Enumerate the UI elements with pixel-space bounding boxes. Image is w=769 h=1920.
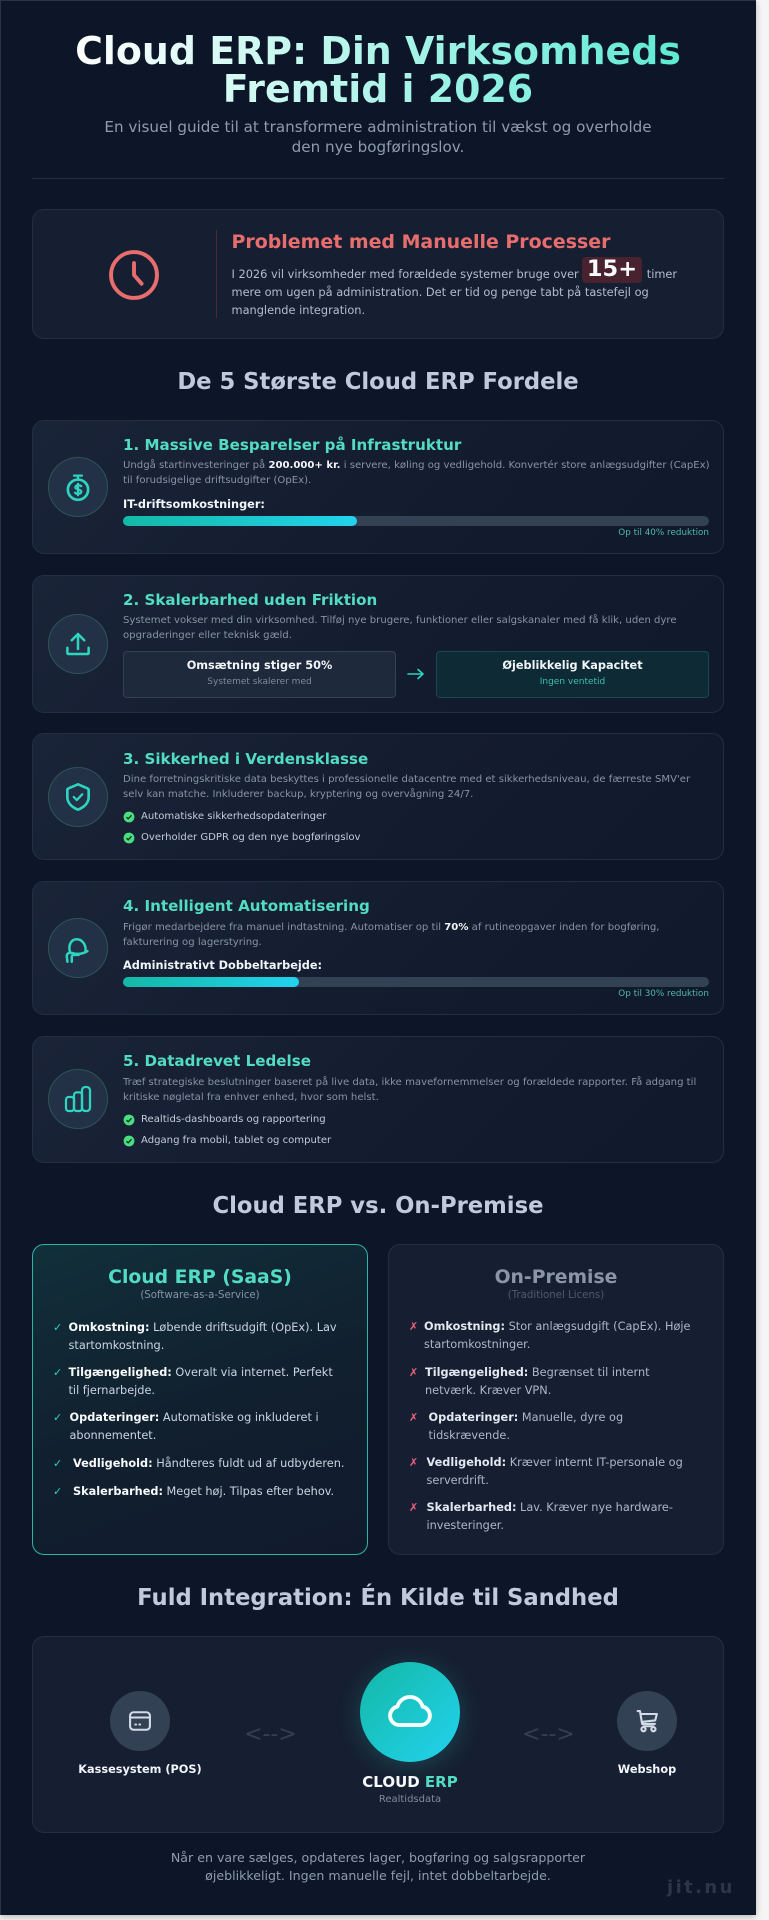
panel: problem — [32, 178, 724, 339]
panel: benefit 5 — [32, 1036, 724, 1163]
problem text — [232, 267, 678, 316]
benefit 5 title: 5. Datadrevet Ledelse — [123, 1052, 311, 1070]
benefit 3 text: selv kan matche. Inkluderer backup, kryptering og overvågning 24/7. — [123, 789, 473, 800]
panel: benefit 4 — [32, 881, 724, 1015]
closing text: Når en vare sælges, opdateres lager, bogføring og salgsrapporter — [171, 1850, 585, 1865]
benefit 3 text — [123, 774, 690, 800]
problem text: I 2026 vil virksomheder med forældede systemer bruge over timer — [232, 267, 677, 281]
panel: Cloud ERP: Tilgængelighed: Overalt via internet. Perfekt — [68, 1366, 333, 1379]
arrow: POS to ERP: <--> — [244, 1722, 297, 1747]
item: skalerbarhed: ✓ — [53, 1485, 62, 1498]
On-Premise subheading: (Traditionel Licens) — [508, 1290, 604, 1301]
Cloud ERP subheading: (Software-as-a-Service) — [140, 1290, 260, 1301]
panel: Cloud ERP: Vedligehold: Håndteres fuldt ud af udbyderen. — [73, 1457, 344, 1470]
box: omsætning: Systemet skalerer med — [207, 677, 312, 687]
box: omsætning — [123, 651, 396, 698]
icon: card terminal — [110, 1691, 170, 1751]
panel: On-Premise: startomkostninger. — [424, 1338, 530, 1351]
panel: benefit 3 — [32, 733, 724, 860]
item: skalerbarhed: ✗ — [409, 1501, 418, 1514]
panel: Cloud ERP: Skalerbarhed: Meget høj. Tilpas efter behov. — [73, 1485, 334, 1498]
panel: On-Premise: serverdrift. — [426, 1474, 489, 1487]
Cloud ERP heading: Cloud ERP (SaaS) — [108, 1267, 292, 1288]
panel: Cloud ERP: Opdateringer: Automatiske og inkluderet i — [70, 1411, 319, 1424]
benefit 1 text: til forudsigelige driftsudgifter (OpEx). — [123, 475, 311, 486]
panel: On-Premise: Vedligehold: Kræver internt IT-personale og — [426, 1456, 683, 1469]
benefit 4 text: fakturering og lagerstyring. — [123, 937, 262, 948]
panel: Cloud ERP: til fjernarbejde. — [68, 1384, 155, 1397]
title: Cloud ERP: Din Virksomheds — [75, 29, 681, 73]
panel: benefit 2 — [32, 575, 724, 713]
panel: Cloud ERP — [32, 1244, 368, 1555]
icon: upload — [48, 614, 108, 674]
caption: 30% reduktion: Op til 30% reduktion — [618, 989, 709, 999]
heading: integration: Fuld Integration: Én Kilde til Sandhed — [137, 1585, 619, 1611]
caption: 40% reduktion: Op til 40% reduktion — [618, 528, 709, 538]
benefit 5 text: Træf strategiske beslutninger baseret på live data, ikke mavefornemmelser og forældede rapporter. Få adgang til — [123, 1077, 696, 1088]
webshop label: Webshop — [618, 1763, 676, 1776]
closing text: øjeblikkeligt. Ingen manuelle fejl, intet dobbeltarbejde. — [205, 1868, 551, 1883]
box: kapacitet: Ingen ventetid — [540, 677, 605, 687]
box: kapacitet: Øjeblikkelig Kapacitet — [502, 659, 643, 672]
box: kapacitet — [436, 651, 709, 698]
On-Premise heading: On-Premise — [495, 1267, 617, 1288]
benefit 1 text — [123, 459, 710, 486]
panel: Cloud ERP: Omkostning: Løbende driftsudgift (OpEx). Lav — [68, 1321, 337, 1334]
Cloud ERP label: CLOUD ERP — [362, 1773, 458, 1791]
panel: On-Premise: netværk. Kræver VPN. — [425, 1384, 551, 1397]
benefit 1 text: Undgå startinvesteringer på 200.000+ kr. i servere, køling og vedligehold. Konvertér store anlægsudgifter (CapEx) — [123, 460, 710, 471]
benefit 2 title: 2. Skalerbarhed uden Friktion — [123, 591, 377, 609]
icon: stopwatch dollar — [48, 457, 108, 517]
benefit 4 text — [123, 922, 659, 948]
list item: Realtids-dashboards og rapportering — [141, 1114, 326, 1125]
item: omkostning: ✓ — [53, 1321, 62, 1334]
problem text: mere om ugen på administration. Det er tid og penge tabt på tastefejl og — [232, 285, 649, 299]
title — [75, 32, 681, 108]
label: Administrativt Dobbeltarbejde: Administrativt Dobbeltarbejde: — [123, 959, 322, 972]
panel: benefit 1 — [32, 420, 724, 554]
box: omsætning: Omsætning stiger 50% — [187, 659, 332, 672]
benefit 2 text — [123, 614, 677, 641]
icon: clock — [109, 250, 159, 300]
benefit 1 title: 1. Massive Besparelser på Infrastruktur — [123, 436, 461, 454]
item: tilgængelighed: ✓ — [53, 1366, 62, 1379]
subtitle — [104, 118, 652, 156]
Realtidsdata label: Realtidsdata — [379, 1794, 441, 1805]
item: opdateringer: ✓ — [53, 1411, 62, 1424]
panel: On-Premise: Tilgængelighed: Begrænset til internt — [425, 1366, 650, 1379]
label: IT-driftsomkostninger: IT-driftsomkostninger: — [123, 498, 265, 511]
item: tilgængelighed: ✗ — [409, 1366, 418, 1379]
arrow: ERP to webshop: <--> — [522, 1722, 575, 1747]
icon: bars — [48, 1069, 108, 1129]
icon: hand — [48, 918, 108, 978]
node: POS — [78, 1691, 202, 1776]
arrow — [407, 668, 424, 680]
item: vedligehold: ✗ — [409, 1456, 418, 1469]
problem heading: Problemet med Manuelle Processer — [232, 231, 610, 253]
panel: Cloud ERP: abonnementet. — [70, 1429, 156, 1442]
benefit 3 title: 3. Sikkerhed i Verdensklasse — [123, 750, 368, 768]
benefit 4 title: 4. Intelligent Automatisering — [123, 897, 370, 915]
item: vedligehold: ✓ — [53, 1457, 62, 1470]
benefit 5 text: kritiske nøgletal fra enhver enhed, hvor som helst. — [123, 1092, 379, 1103]
icon: shield — [48, 767, 108, 827]
item: opdateringer: ✗ — [409, 1411, 418, 1424]
problem text: manglende integration. — [232, 302, 365, 316]
stat badge: 15+: 15+ — [587, 256, 637, 282]
icon: cloud — [360, 1662, 460, 1762]
icon: cart — [617, 1691, 677, 1751]
subtitle: En visuel guide til at transformere administration til vækst og overholde — [104, 118, 652, 136]
progress bar: 40% — [123, 516, 709, 526]
node: Cloud ERP — [352, 1658, 468, 1805]
heading: benefits: De 5 Største Cloud ERP Fordele — [177, 369, 579, 395]
list item: Adgang fra mobil, tablet og computer — [141, 1135, 331, 1146]
panel: On-Premise — [388, 1244, 724, 1555]
heading: comparison: Cloud ERP vs. On-Premise — [212, 1193, 543, 1219]
panel: On-Premise: Opdateringer: Manuelle, dyre og — [428, 1411, 623, 1424]
benefit 4 text: Frigør medarbejdere fra manuel indtastning. Automatiser op til 70% af rutineopgaver inden for bogføring, — [123, 922, 659, 933]
panel: Cloud ERP: startomkostning. — [68, 1339, 164, 1352]
benefit 2 text: opgraderinger eller teknisk gæld. — [123, 630, 292, 641]
benefit 5 text — [123, 1076, 696, 1103]
POS label: Kassesystem (POS) — [78, 1763, 202, 1776]
subtitle: den nye bogføringslov. — [292, 138, 464, 156]
node: webshop — [617, 1691, 677, 1776]
panel: On-Premise: investeringer. — [426, 1519, 504, 1532]
list item: Automatiske sikkerhedsopdateringer — [141, 811, 326, 822]
benefit 2 text: Systemet vokser med din virksomhed. Tilføj nye brugere, funktioner eller salgskanaler med få klik, uden dyre — [123, 615, 677, 626]
progress bar: 30% — [123, 977, 709, 987]
title: Fremtid i 2026 — [223, 67, 533, 111]
panel: On-Premise: Omkostning: Stor anlægsudgift (CapEx). Høje — [424, 1320, 690, 1333]
panel: On-Premise: tidskrævende. — [428, 1429, 510, 1442]
closing text — [171, 1850, 586, 1883]
watermark: jit.nu — [667, 1877, 735, 1898]
benefit 3 text: Dine forretningskritiske data beskyttes i professionelle datacentre med et sikkerhedsniveau, de færreste SMV'er — [123, 774, 690, 785]
item: omkostning: ✗ — [409, 1320, 418, 1333]
list item: Overholder GDPR og den nye bogføringslov — [141, 832, 361, 843]
panel: On-Premise: Skalerbarhed: Lav. Kræver nye hardware- — [426, 1501, 673, 1514]
